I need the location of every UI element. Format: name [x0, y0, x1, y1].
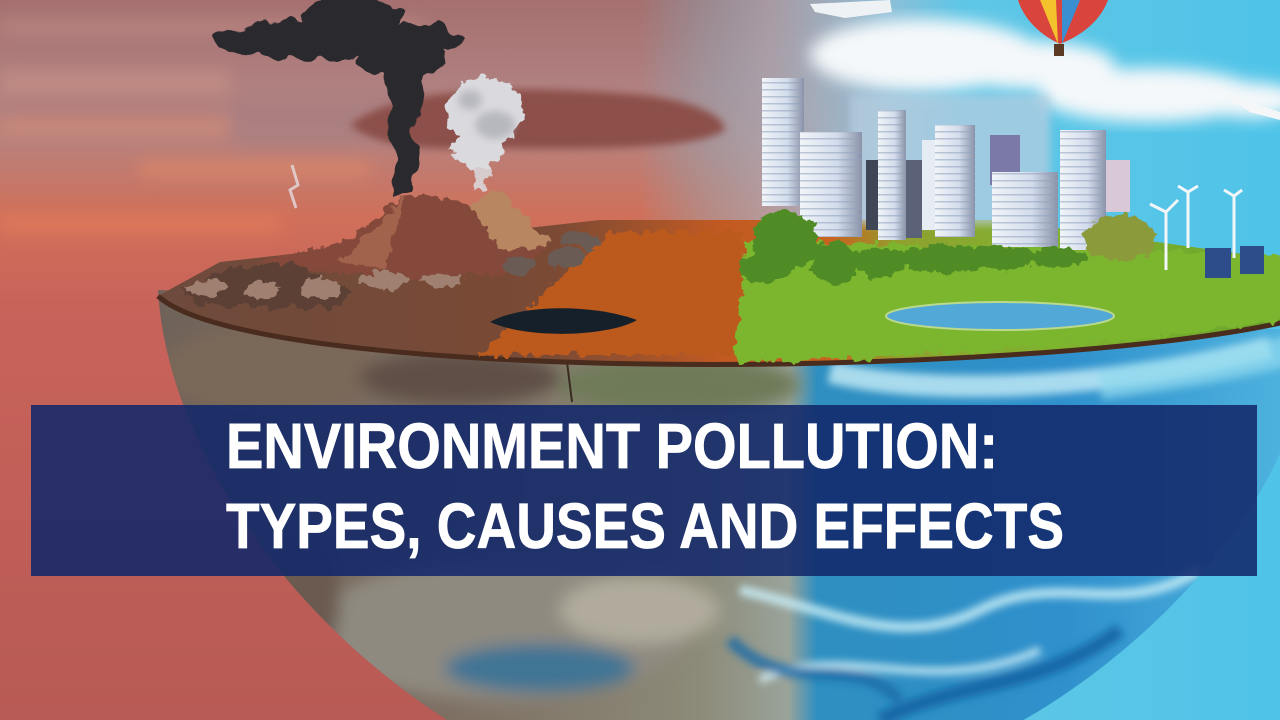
aeroplane right — [1220, 92, 1280, 120]
floating land disc — [158, 220, 1280, 364]
scorched earth — [480, 232, 745, 355]
lightning bolt — [290, 165, 298, 208]
volcanic smoke plumes — [215, 0, 725, 195]
aeroplane top — [810, 0, 892, 18]
trees and bushes — [739, 210, 1156, 284]
clouds — [810, 19, 1280, 122]
city skyline — [762, 78, 1130, 250]
title line 1: ENVIRONMENT POLLUTION: — [226, 410, 998, 482]
title banner — [31, 405, 1257, 576]
wind turbines — [1150, 186, 1242, 270]
blue lake — [886, 302, 1114, 330]
grass area — [735, 240, 1280, 362]
solar panels — [1205, 246, 1264, 278]
volcano and rocks — [180, 190, 602, 308]
globe lower half — [150, 280, 1280, 720]
hot air balloon — [1018, 0, 1108, 56]
title line 2: TYPES, CAUSES AND EFFECTS — [226, 490, 1064, 562]
dark crater pond — [490, 308, 637, 334]
